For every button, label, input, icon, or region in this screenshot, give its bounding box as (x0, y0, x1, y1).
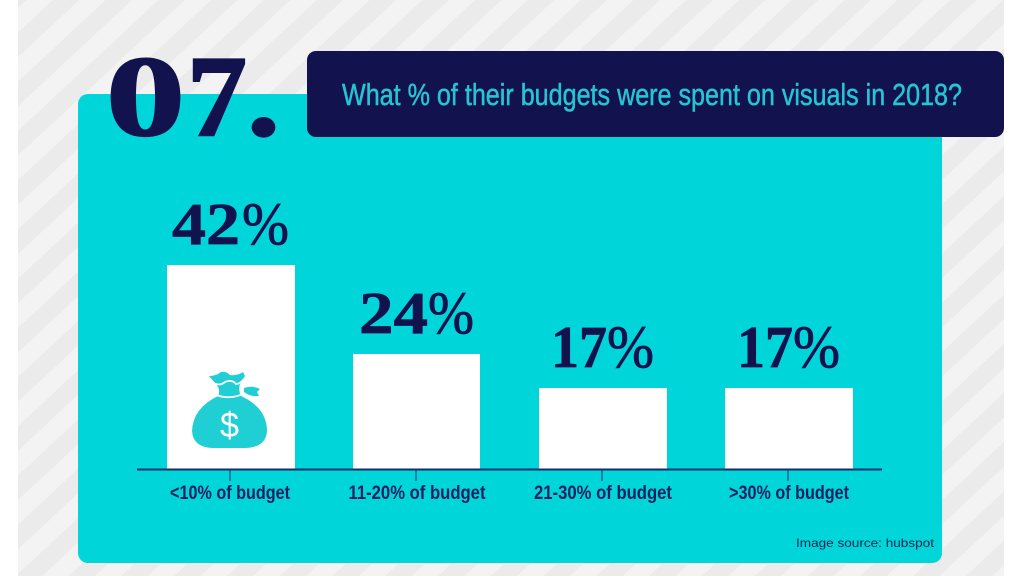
big number 07.: 0 (106, 33, 185, 160)
bar: 11-20%: % (428, 280, 474, 346)
panel: teal card (78, 94, 942, 563)
bar: under 10%: 42 (172, 191, 240, 257)
axis labels: 11-20% of budget (348, 483, 486, 504)
axis line with ticks (137, 469, 882, 481)
icon: money bag (192, 372, 267, 448)
icon: money bag: $ (220, 406, 239, 445)
source note: Image source: hubspot (796, 536, 935, 550)
bar: 21-30% (539, 314, 667, 469)
axis labels (170, 483, 850, 504)
big number 07.: 7 (187, 33, 247, 160)
bar chart (137, 191, 882, 504)
bar: 11-20%: 24 (359, 280, 428, 346)
bar: over 30% (725, 314, 853, 469)
bar: 21-30%: % (607, 314, 654, 380)
bar: over 30%: % (793, 314, 840, 380)
bar: under 10%: % (242, 191, 289, 257)
bar: 21-30%: 17 (551, 314, 607, 380)
axis labels: <10% of budget (170, 483, 291, 504)
axis labels: 21-30% of budget (534, 483, 673, 504)
big number 07. (106, 33, 280, 160)
axis labels: >30% of budget (729, 483, 850, 504)
bar: under 10% (167, 191, 295, 469)
bar: over 30%: 17 (737, 314, 793, 380)
header banner (307, 51, 1004, 137)
bar: 11-20% (353, 280, 480, 469)
big number 07.: . (247, 33, 280, 160)
